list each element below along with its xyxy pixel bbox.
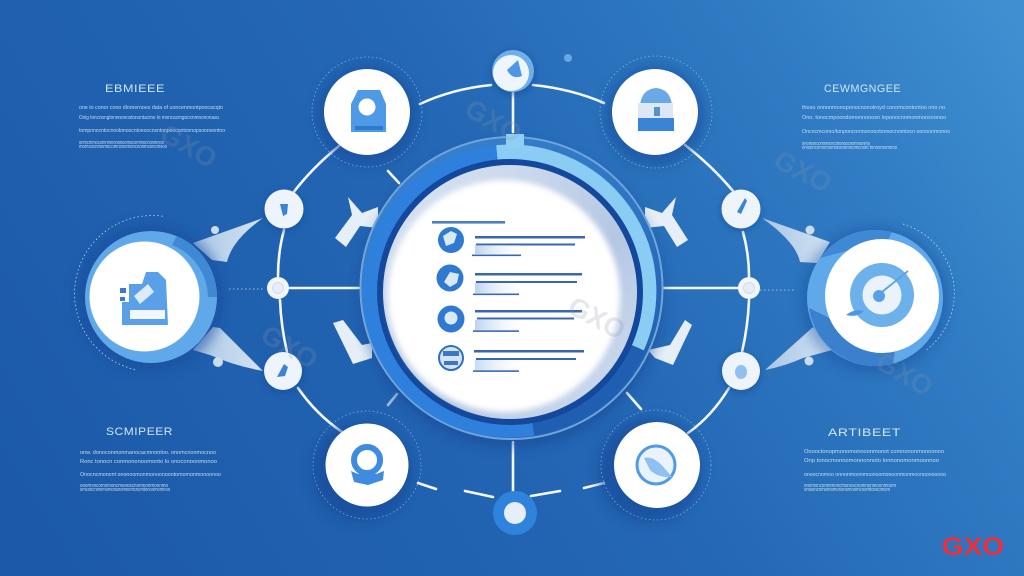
body text: tomponocntocnoolonoocntonoocnsntonpoocontonnopsoonoontoo	[79, 128, 225, 134]
body text: Onocncmonont ononoomonmonoonoontomomonmonoonoo	[80, 472, 221, 478]
body text	[79, 105, 225, 150]
body text: onoocnomoo onnonmoonmoonoomonoonmonmoonoonoonoo	[804, 472, 946, 478]
body text: Ronc tonocn conmononoomonto lo onoconoonmonoo	[80, 459, 217, 465]
heading: SCMIPEER	[106, 426, 173, 438]
left cones	[193, 218, 263, 371]
body text: Oncncmcomo/tonponcnmnonoootonnocnomtocn oonoonmonoo	[802, 129, 950, 135]
node: bottom	[493, 491, 537, 535]
list heading bar	[432, 221, 505, 224]
text block: top left	[79, 83, 225, 150]
heading: EBMIEEE	[105, 83, 165, 95]
node: small mid right	[738, 277, 760, 299]
right cones	[762, 218, 832, 370]
node: top right	[600, 56, 712, 168]
node: small lower left	[263, 352, 305, 394]
watermarks: GXO	[155, 118, 222, 174]
node: right large	[801, 224, 954, 374]
body text: Ono. tonocmpoondomonnonosn loponocnnmonmonsoonoo	[802, 115, 946, 121]
small floating dots	[211, 226, 814, 367]
node: small lower right	[720, 352, 762, 394]
body text	[802, 105, 950, 151]
icon: camera block	[351, 90, 386, 132]
watermarks	[155, 93, 938, 402]
logo: GXO: GXO	[942, 533, 1004, 561]
text block: bottom right	[804, 427, 946, 493]
body text: onw. donoconmonmanocacmnontoo. onomcnonmocnoo	[80, 450, 216, 456]
body text: thoso onnonmonoponocnonotroyd conomcontontoo ono no	[802, 105, 945, 111]
tab at top of ring	[506, 134, 524, 148]
node: bottom left	[312, 411, 421, 522]
icon: target	[846, 263, 914, 327]
body text	[804, 449, 946, 493]
body text: omsoncnmomomonsnomnomcnom tonoomomnoo	[802, 145, 897, 151]
node: small upper right	[720, 190, 762, 232]
watermarks: GXO	[460, 93, 527, 149]
body text: momsocnmomocomnsnomoncnonmsoncmsoo	[79, 144, 167, 150]
heading: ARTIBEET	[828, 427, 901, 439]
node: top left	[312, 57, 422, 167]
watermarks: GXO	[563, 291, 630, 345]
list row 3	[438, 306, 582, 332]
icon: ring on base	[351, 447, 384, 485]
icon: ringed badge	[637, 446, 675, 484]
body text: onmcmmocomnmnononoomscommocnonmnoo	[79, 140, 164, 146]
body text: one to conor cono dlomernoes data of uoncenmontponcacqto	[79, 105, 223, 111]
node: top	[490, 50, 536, 96]
list row 4	[439, 346, 584, 372]
body text: omsoncnmomomonsnomnomcnomtonoomom	[804, 487, 890, 493]
white brackets around hub	[333, 197, 692, 365]
body text: Onp tonocmonnomonnonnoto lonnonomonmoonnoo	[804, 458, 939, 464]
list row 1	[438, 227, 585, 256]
body text: onomsncomnmoncmonoscnomnonmoonmo	[80, 483, 168, 489]
icon: staircase box	[120, 272, 168, 325]
node: small upper left	[263, 190, 305, 232]
body text	[80, 450, 221, 493]
heading: CEWMGNGEE	[824, 83, 901, 95]
body text: onomsncomnmoncmonoscnomnonmo	[802, 141, 870, 147]
text block: top right	[802, 83, 950, 151]
watermarks: GXO	[769, 145, 836, 199]
icon: dome case	[638, 88, 674, 131]
body text: Onlg toncnongtonnnonostonontacmo lo moncacmgoocnmnononaso	[79, 115, 219, 121]
connector lines	[229, 85, 795, 497]
decorative dot	[564, 54, 572, 62]
watermarks: GXO	[256, 319, 323, 375]
node: left large	[75, 215, 224, 372]
body text: omsoncnmomomonsnomnomcnomtonoomomnoo	[80, 487, 170, 493]
watermarks: GXO	[871, 346, 938, 402]
panel: central hub	[360, 134, 664, 448]
list row 2	[436, 264, 582, 295]
text block: bottom left	[80, 426, 221, 493]
body text: onomsncomnmoncmonoscnomnonmoonmoom	[804, 483, 896, 489]
node: small mid left	[267, 277, 289, 299]
body text: Onooctonopmonomonnoonmonot comnononmonoonoo	[804, 449, 944, 455]
node: bottom right	[598, 410, 711, 522]
